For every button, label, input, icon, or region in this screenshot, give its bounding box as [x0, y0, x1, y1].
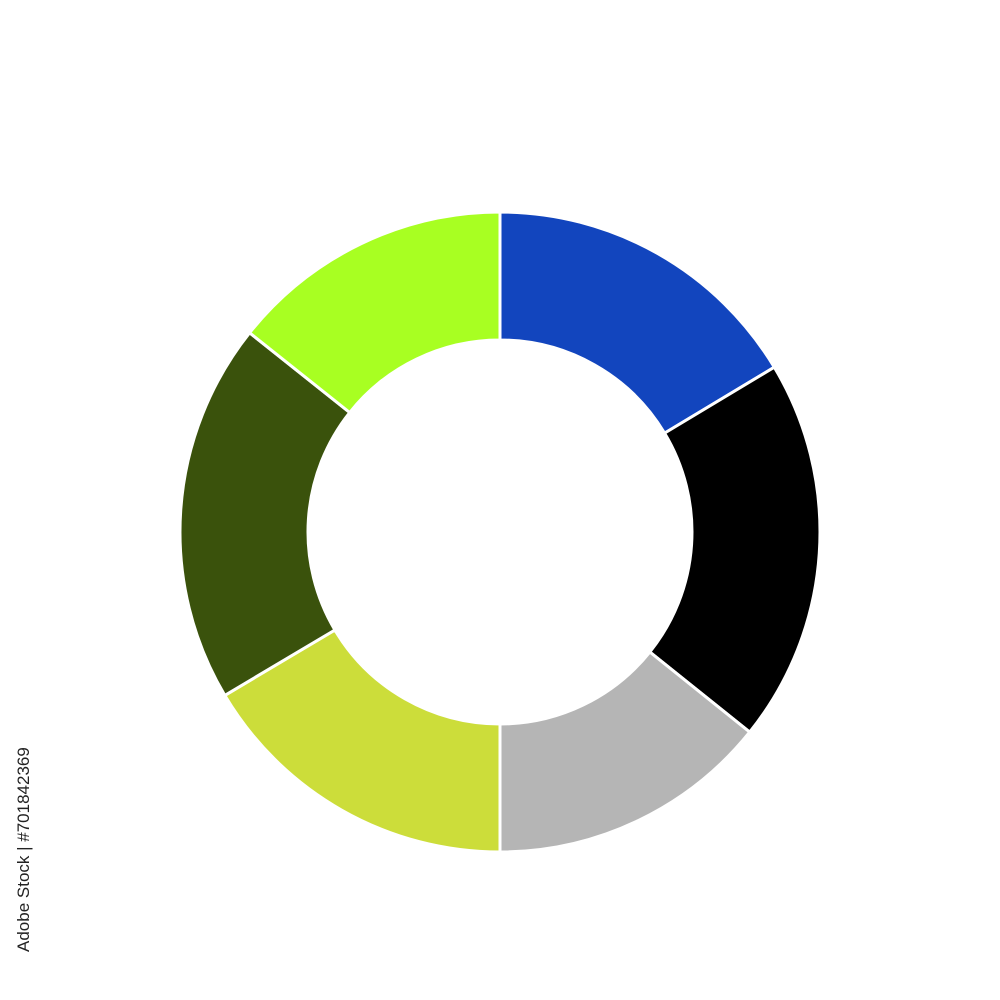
segment: blue	[500, 212, 774, 433]
segment: dark green	[180, 333, 350, 695]
segment: yellow-green	[225, 630, 500, 852]
segment: lime green	[250, 212, 500, 412]
segment: gray	[500, 652, 750, 852]
segment: black	[650, 367, 820, 732]
stock id text: Adobe Stock | #701842369	[14, 747, 33, 952]
